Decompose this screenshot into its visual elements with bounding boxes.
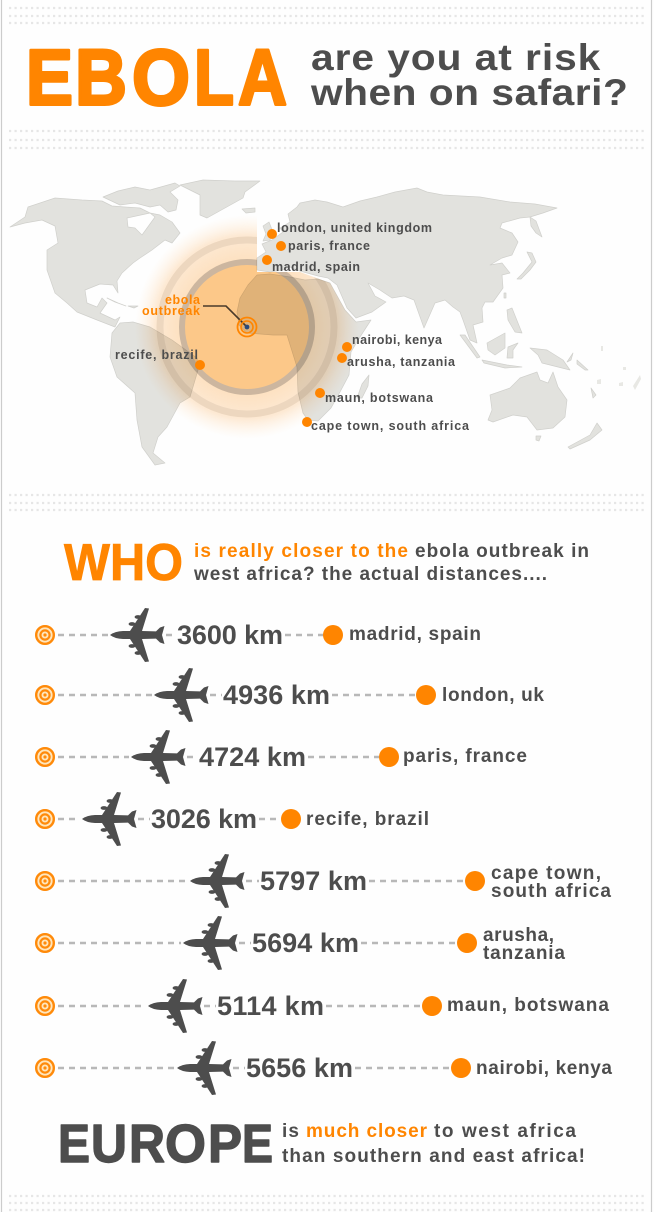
distance row: paris: 4724 km [199, 742, 306, 772]
subtitle: are you at risk when on safari [310, 38, 628, 114]
conclusion text: than southern and east africa! [282, 1146, 585, 1167]
conclusion heading: EUROPE: O [165, 1114, 206, 1174]
sakhalin and kamchatka [530, 217, 542, 237]
distance row: nairobi: nairobi, kenya [476, 1058, 612, 1079]
pacific specks [597, 346, 641, 390]
title: EBOLA [26, 32, 287, 122]
title: EBOLA: E [26, 32, 73, 122]
japan [517, 252, 536, 279]
north america [10, 198, 180, 327]
city labels [115, 221, 470, 433]
outbreak radius circles [135, 215, 359, 439]
south america [110, 322, 198, 465]
city labels: madrid, spain [272, 260, 360, 274]
heading text: is really closer to the ebola outbreak: ebola outbreak in [415, 541, 589, 562]
distance row: arusha: arusha, [483, 925, 554, 946]
distance row: madrid: madrid, spain [349, 624, 481, 645]
title: EBOLA: B [75, 32, 127, 122]
distance row: cape town [35, 854, 611, 908]
distance row: maun [35, 979, 609, 1033]
conclusion heading: EUROPE: R [129, 1114, 165, 1174]
distance row: maun: 5114 km [217, 991, 324, 1021]
heading: WHO: WHO [64, 534, 183, 592]
distance row: cape town: 5797 km [260, 866, 367, 896]
title: EBOLA: O [132, 32, 190, 122]
iceland [242, 208, 255, 213]
conclusion text [282, 1121, 585, 1167]
city labels: maun, botswana [325, 391, 434, 405]
indonesia and islands [460, 308, 596, 398]
subtitle: are you at risk when on safari: are you at risk [311, 38, 601, 79]
ebola outbreak label [142, 293, 201, 318]
distance row: arusha: 5694 km [252, 928, 359, 958]
distance row: arusha: tanzania [483, 943, 565, 964]
outbreak target marker [238, 318, 256, 336]
heading text: is really closer to the ebola outbreak: west africa? the actual distances.... [193, 564, 547, 585]
outbreak leader line [203, 306, 247, 327]
city labels: cape town, south africa [311, 419, 470, 433]
distance row: cape town: cape town, [491, 863, 601, 884]
hudson bay [127, 213, 155, 235]
city labels: paris, france [288, 239, 370, 253]
distance row: nairobi [35, 1041, 612, 1095]
conclusion heading: EUROPE: E [58, 1114, 90, 1174]
distance row: recife: recife, brazil [306, 809, 429, 830]
madagascar [357, 375, 369, 398]
conclusion text: to west africa [434, 1121, 576, 1142]
title: EBOLA: L [194, 32, 234, 122]
great britain [263, 222, 273, 241]
distance row: maun: maun, botswana [447, 995, 609, 1016]
title: EBOLA: A [238, 32, 287, 122]
taiwan [504, 293, 506, 298]
distance row: nairobi: 5656 km [246, 1053, 353, 1083]
distance row: london [35, 668, 544, 722]
distance row: paris: paris, france [403, 746, 527, 767]
canadian arctic islands [103, 183, 180, 212]
city labels: nairobi, kenya [352, 333, 443, 347]
conclusion heading: EUROPE: E [242, 1114, 273, 1174]
subtitle: are you at risk when on safari: when on safari? [310, 73, 628, 114]
new zealand and tasmania [536, 423, 602, 449]
conclusion text: is [282, 1121, 299, 1142]
conclusion heading: EUROPE [58, 1114, 273, 1174]
world map [10, 180, 641, 465]
city labels: arusha, tanzania [347, 355, 456, 369]
australia [488, 372, 567, 430]
eurasia [257, 188, 557, 343]
heading text: is really closer to the ebola outbreak [193, 541, 589, 585]
distance row: paris [35, 730, 527, 784]
distance row: madrid [35, 608, 481, 662]
conclusion text: much closer [306, 1121, 428, 1142]
land masses [10, 180, 641, 465]
ebola outbreak label: ebola [165, 293, 201, 307]
greenland [180, 180, 260, 218]
distance row: recife: 3026 km [151, 804, 257, 834]
distance row: recife [35, 792, 429, 846]
distance row: arusha [35, 916, 565, 970]
city labels: london, united kingdom [277, 221, 432, 235]
distance row: cape town: south africa [491, 881, 611, 902]
ebola outbreak label: outbreak [142, 304, 200, 318]
distance row: london: london, uk [442, 685, 544, 706]
city labels: recife, brazil [115, 348, 198, 362]
caribbean islands [107, 298, 138, 308]
conclusion heading: EUROPE: P [208, 1114, 242, 1174]
africa [237, 274, 371, 421]
conclusion heading: EUROPE: U [91, 1114, 127, 1174]
heading text: is really closer to the ebola outbreak: is really closer to the [194, 541, 408, 562]
city marker dots [195, 229, 352, 427]
distance row: madrid: 3600 km [177, 620, 283, 650]
distance row: london: 4936 km [223, 680, 330, 710]
